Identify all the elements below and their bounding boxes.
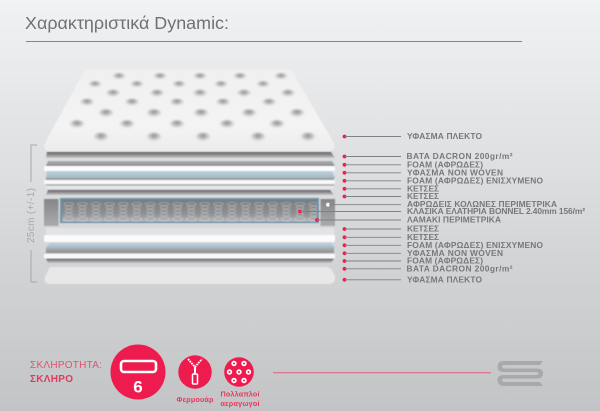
spec labels with leader lines <box>298 131 585 284</box>
label: bonnell springs: ΚΛΑΣΙΚΑ ΕΛΑΤΗΡΙΑ BONNEL 2.40mm 156/m² <box>407 206 585 216</box>
bonnell spring unit <box>60 198 319 223</box>
icon: zipper <box>178 355 212 389</box>
label: foam columns <box>326 199 557 209</box>
label: foam top: FOAM (ΑΦΡΩΔΕΣ) <box>407 159 483 169</box>
label: felt 2 <box>343 191 439 201</box>
zipper caption: Φερμουάρ <box>176 395 214 404</box>
label: foam bottom <box>343 256 483 266</box>
label: knit fabric top: ΥΦΑΣΜΑ ΠΛΕΚΤΟ <box>407 131 482 141</box>
label: knit fabric top <box>343 131 482 141</box>
firmness text <box>30 360 102 385</box>
label: non woven top: ΥΦΑΣΜΑ NON WOVEN <box>407 167 503 177</box>
label: dacron bottom <box>343 263 513 273</box>
label: bonnell springs <box>298 206 585 216</box>
label: felt 3: ΚΕΤΣΕΣ <box>407 224 439 234</box>
title: Χαρακτηριστικά Dynamic: <box>25 13 229 33</box>
label: foam columns: ΑΦΡΩΔΕΙΣ ΚΟΛΩΝΕΣ ΠΕΡΙΜΕΤΡΙΚΑ <box>407 199 557 209</box>
icon: multiple air vents <box>224 357 254 387</box>
upper comfort layers <box>44 152 335 195</box>
label: non woven bottom: ΥΦΑΣΜΑ NON WOVEN <box>407 248 503 258</box>
top quilted pillow layer <box>44 69 334 151</box>
label: dacron bottom: BATA DACRON 200gr/m² <box>406 263 513 273</box>
label: steel frame: ΛΑΜΑΚΙ ΠΕΡΙΜΕΤΡΙΚΑ <box>407 214 501 224</box>
label: steel frame <box>315 214 501 224</box>
label: felt 4: ΚΕΤΣΕΣ <box>407 232 439 242</box>
perimeter foam side columns <box>44 199 335 226</box>
label: reinforced foam bottom <box>343 240 543 250</box>
label: knit fabric bottom: ΥΦΑΣΜΑ ΠΛΕΚΤΟ <box>407 274 482 284</box>
label: felt 3 <box>343 224 439 234</box>
bottom pillow layer <box>45 267 335 284</box>
footer divider line <box>273 372 491 374</box>
logo mark <box>498 361 543 386</box>
mattress cross-section illustration <box>44 69 335 284</box>
firmness text: ΣΚΛΗΡΟ <box>30 374 73 385</box>
label: felt 1 <box>343 183 439 193</box>
label: non woven bottom <box>343 248 503 258</box>
label: reinforced foam top: FOAM (ΑΦΡΩΔΕΣ) ΕΝΙΣΧΥΜΕΝΟ <box>407 175 543 185</box>
label: felt 4 <box>343 232 439 242</box>
label: felt 2: ΚΕΤΣΕΣ <box>407 191 439 201</box>
label: reinforced foam top <box>343 175 543 185</box>
height bracket: 25cm (+/-1): 25cm (+/-1) <box>26 188 37 243</box>
height bracket: 25cm (+/-1) <box>26 145 37 282</box>
air vents caption <box>220 390 260 408</box>
firmness text: ΣΚΛΗΡΟΤΗΤΑ: <box>30 360 102 371</box>
label: knit fabric bottom <box>343 274 482 284</box>
label: non woven top <box>343 167 503 177</box>
air vents caption: Πολλαπλοί <box>220 390 260 398</box>
label: dacron top: BATA DACRON 200gr/m² <box>406 151 513 161</box>
lower comfort layers <box>44 228 335 263</box>
label: felt 1: ΚΕΤΣΕΣ <box>407 183 439 193</box>
label: foam bottom: FOAM (ΑΦΡΩΔΕΣ) <box>407 256 483 266</box>
air vents caption: αεραγωγοί <box>220 399 260 408</box>
label: foam top <box>343 159 483 169</box>
icon: firmness scale 6: 6 <box>133 378 143 396</box>
icon: firmness scale 6 <box>110 344 166 400</box>
label: reinforced foam bottom: FOAM (ΑΦΡΩΔΕΣ) ΕΝΙΣΧΥΜΕΝΟ <box>407 240 543 250</box>
label: dacron top <box>343 151 513 161</box>
